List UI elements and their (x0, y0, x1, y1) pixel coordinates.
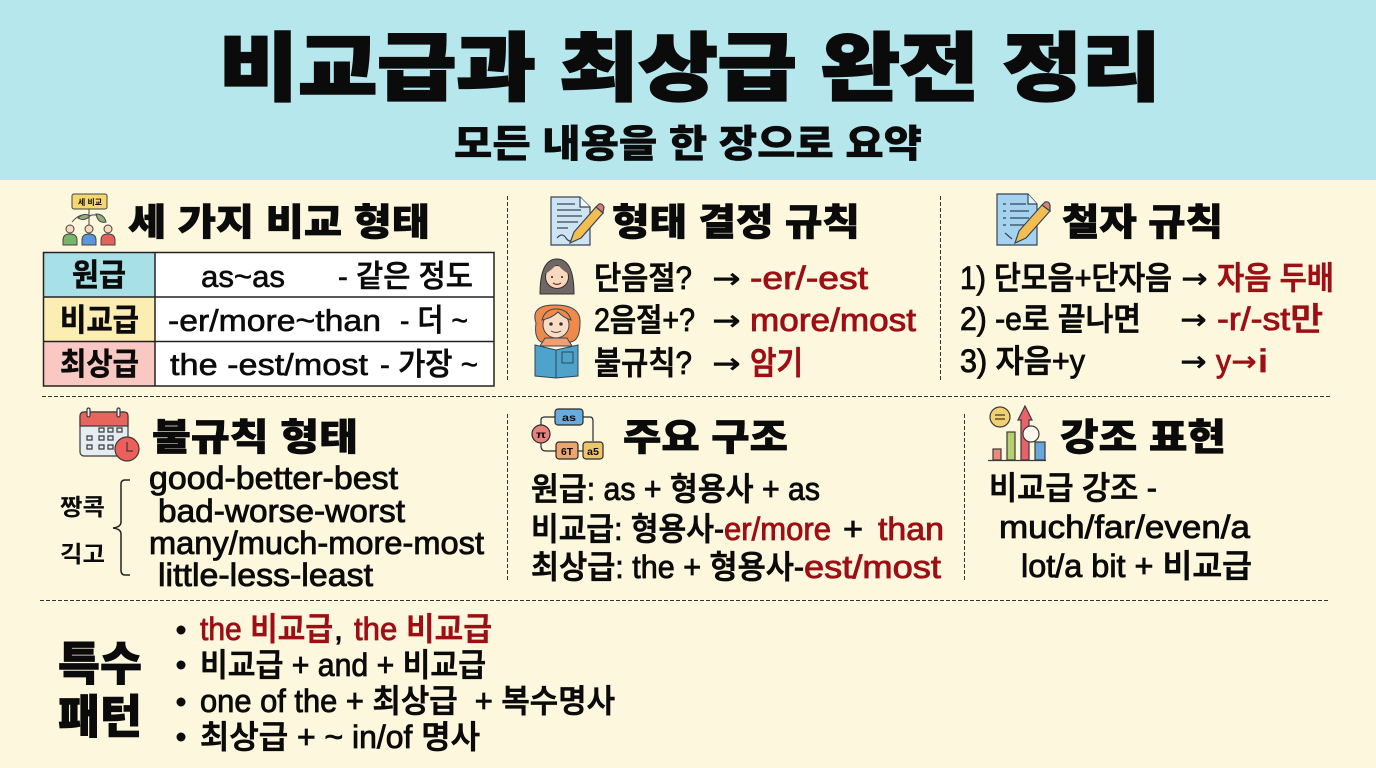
icon: document with pencil (551, 197, 604, 245)
heading: 형태 결정 규칙 (612, 202, 860, 243)
structure rows: 최상급: the + 형용사- (531, 549, 804, 585)
side label: 긱고 (60, 541, 105, 567)
icon: calendar with clock (80, 408, 139, 461)
heading: 강조 표현 (1060, 417, 1226, 458)
heading: 세 가지 비교 형태 (128, 202, 430, 243)
irregular word list: many/much-more-most (149, 525, 484, 561)
spelling rows (960, 260, 1334, 379)
rule rows: → (712, 304, 741, 337)
side label: 짱콕 (60, 494, 105, 520)
panel: three comparison forms: 세 비교 (78, 197, 103, 207)
panel: main structures: π (536, 430, 546, 441)
heading: 철자 규칙 (1062, 202, 1223, 243)
comparison table: - 가장 ~ (380, 347, 478, 382)
bullet list: the 비교급 (200, 611, 333, 647)
emphasis rows: much/far/even/a (999, 509, 1250, 545)
bullet list: one of the + 최상급 + 복수명사 (200, 683, 615, 719)
structure rows (531, 471, 944, 585)
spelling rows: 3) 자음+y (960, 343, 1085, 379)
title banner (0, 0, 1376, 180)
rule rows: 암기 (750, 345, 803, 381)
structure rows: er/more (724, 511, 831, 547)
comparison table: 원급 (72, 258, 126, 293)
irregular word list: little-less-least (158, 557, 373, 593)
irregular word list: good-better-best (149, 460, 398, 496)
comparison table: - 더 ~ (400, 303, 468, 338)
panel: main structures: 6T (561, 447, 573, 458)
comparison table: 비교급 (60, 303, 139, 338)
spelling rows: 2) -e로 끝나면 (960, 301, 1141, 337)
panel: irregular forms (60, 408, 484, 593)
rule rows: 2음절+? (594, 302, 695, 338)
heading (58, 638, 142, 743)
bullet list: 비교급 + and + 비교급 (200, 647, 486, 683)
title: 비교급과 최상급 완전 정리 (219, 27, 1161, 110)
spelling rows: → (1231, 345, 1257, 378)
icon: three people with sign (63, 194, 115, 245)
icon: checklist with pencil (997, 194, 1050, 245)
panel: emphasis expressions (988, 406, 1252, 584)
spelling rows: 자음 두배 (1217, 260, 1334, 296)
rule rows: → (712, 262, 741, 295)
panel: spelling rules (960, 194, 1334, 379)
emphasis rows (989, 470, 1252, 584)
panel: special patterns (58, 611, 615, 755)
bullet list: the 비교급 (354, 611, 492, 647)
structure rows: 원급: as + 형용사 + as (531, 471, 820, 507)
heading: 패턴 (58, 691, 142, 743)
structure rows: than (878, 511, 944, 547)
icon: woman with dark hair (540, 259, 574, 294)
structure rows: est/most (804, 549, 941, 585)
panel: three comparison forms (44, 194, 494, 386)
irregular word list: bad-worse-worst (158, 493, 405, 529)
heading: 불규칙 형태 (152, 417, 358, 458)
rule rows: 불규칙? (594, 345, 692, 381)
structure rows: + (843, 511, 863, 547)
bullet list: 최상급 + ~ in/of 명사 (200, 719, 480, 755)
spelling rows: i (1258, 343, 1268, 379)
subtitle: 모든 내용을 한 장으로 요약 (454, 124, 922, 166)
panel: form decision rules (535, 197, 916, 381)
spelling rows: → (1180, 303, 1207, 336)
icon: girl reading a book (535, 305, 580, 378)
comparison table: -er/more~than (168, 303, 381, 338)
heading: 주요 구조 (623, 417, 788, 458)
panel: main structures: a5 (587, 447, 599, 458)
panel: main structures: as (562, 413, 577, 424)
emphasis rows: 비교급 강조 - (989, 470, 1157, 506)
brace (113, 480, 130, 575)
rule rows (594, 260, 916, 381)
irregular word list (149, 460, 484, 593)
icon: chart with arrow and magnifier (988, 406, 1046, 460)
comparison table: the -est/most (170, 347, 368, 382)
emphasis rows: lot/a bit + 비교급 (1021, 548, 1252, 584)
spelling rows: → (1180, 345, 1207, 378)
spelling rows: -r/-st만 (1217, 301, 1323, 337)
bullet list (176, 611, 615, 755)
spelling rows: y (1216, 343, 1231, 379)
spelling rows: → (1181, 262, 1208, 295)
side label (60, 494, 105, 567)
rule rows: 단음절? (594, 260, 692, 296)
comparison table: 최상급 (60, 347, 139, 382)
rule rows: -er/-est (750, 260, 868, 296)
comparison table: - 같은 정도 (338, 259, 473, 294)
comparison table (44, 252, 494, 386)
comparison table: as~as (201, 259, 285, 294)
heading: 특수 (58, 638, 142, 690)
structure rows: 비교급: 형용사- (531, 511, 724, 547)
rule rows: → (712, 347, 741, 380)
rule rows: more/most (750, 302, 916, 338)
bullet list: , (334, 611, 343, 647)
spelling rows: 1) 단모음+단자음 (960, 260, 1172, 296)
icon: flow of as blocks (532, 409, 603, 459)
panel: main structures (531, 409, 944, 585)
